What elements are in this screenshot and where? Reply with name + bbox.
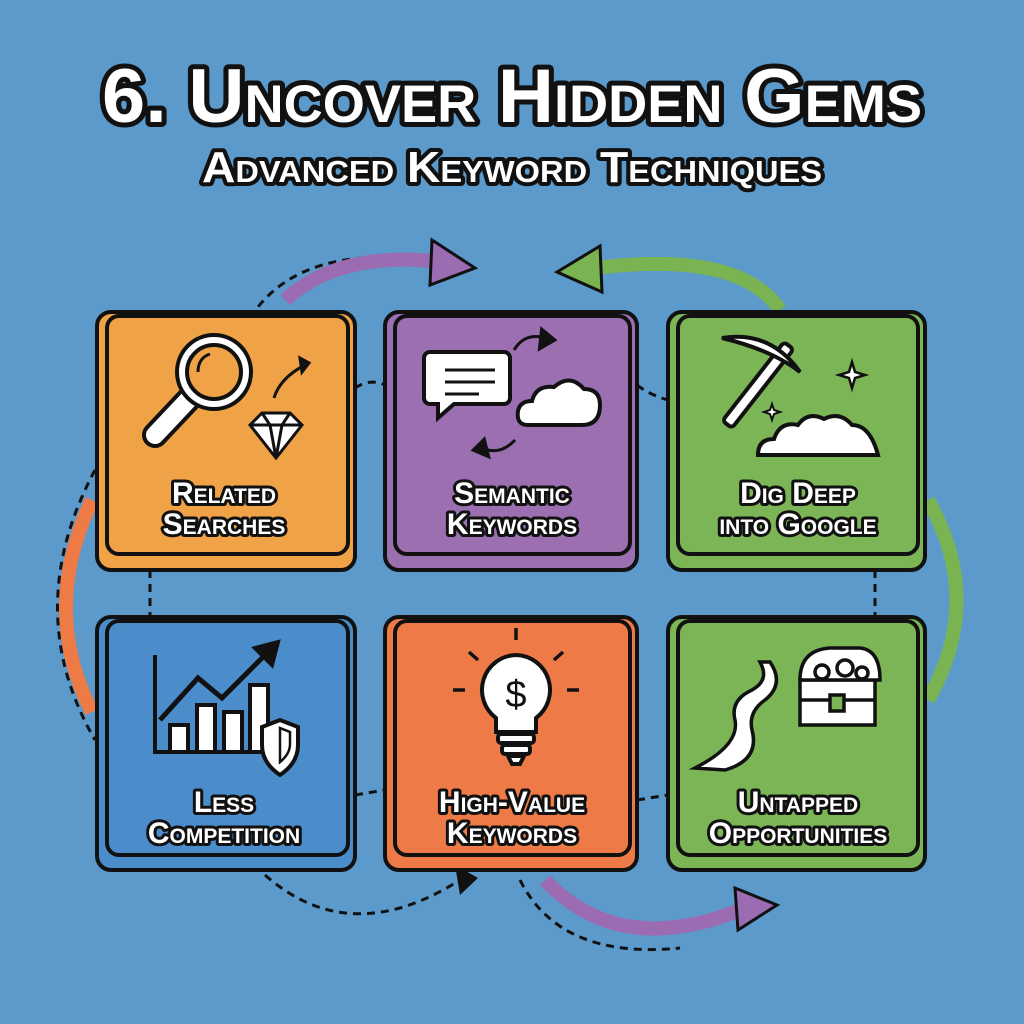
panel: high-value keywords: High-Value bbox=[439, 786, 585, 819]
panel: semantic keywords bbox=[385, 312, 637, 570]
arrow: purple top-left bbox=[250, 240, 475, 318]
panel: semantic keywords: Semantic bbox=[454, 477, 570, 510]
panel: related searches: Related bbox=[172, 477, 276, 510]
icon: chat bubble and cloud bbox=[424, 330, 600, 456]
title: 6. Uncover Hidden Gems bbox=[102, 54, 922, 139]
arrow: orange left bbox=[58, 470, 95, 740]
subtitle: Advanced Keyword Techniques bbox=[202, 143, 822, 192]
panel: high-value keywords bbox=[385, 617, 637, 870]
panel: semantic keywords: Keywords bbox=[447, 508, 577, 541]
panel: dig deep into google bbox=[668, 312, 925, 570]
arrow: purple bottom bbox=[520, 880, 777, 950]
panel: less competition: Less bbox=[194, 786, 254, 819]
icon: pickaxe and dirt bbox=[722, 337, 878, 455]
panel: related searches: Searches bbox=[163, 508, 285, 541]
icon: lightbulb with dollar: $ bbox=[505, 674, 527, 716]
panel: related searches bbox=[97, 312, 355, 570]
icon: path and treasure chest bbox=[695, 648, 880, 770]
icon: lightbulb with dollar bbox=[453, 628, 579, 764]
panel: untapped opportunities bbox=[668, 617, 925, 870]
arrow: green top-right bbox=[557, 246, 780, 310]
panel: less competition: Competition bbox=[148, 817, 300, 850]
panel: high-value keywords: Keywords bbox=[447, 817, 577, 850]
icon: bar chart with arrow and shield bbox=[155, 642, 298, 775]
arrow: green right bbox=[928, 500, 956, 700]
panel: dig deep into google: into Google bbox=[719, 508, 877, 541]
connectors dashed bbox=[150, 382, 875, 800]
icon: magnifier bbox=[155, 335, 251, 435]
arrow: dashed bottom-left bbox=[265, 865, 478, 914]
panel: less competition bbox=[97, 617, 355, 870]
panel: untapped opportunities: Untapped bbox=[738, 786, 858, 819]
icon: diamond with arrow bbox=[250, 358, 309, 458]
panel: untapped opportunities: Opportunities bbox=[709, 817, 887, 850]
panel: dig deep into google: Dig Deep bbox=[740, 477, 856, 510]
